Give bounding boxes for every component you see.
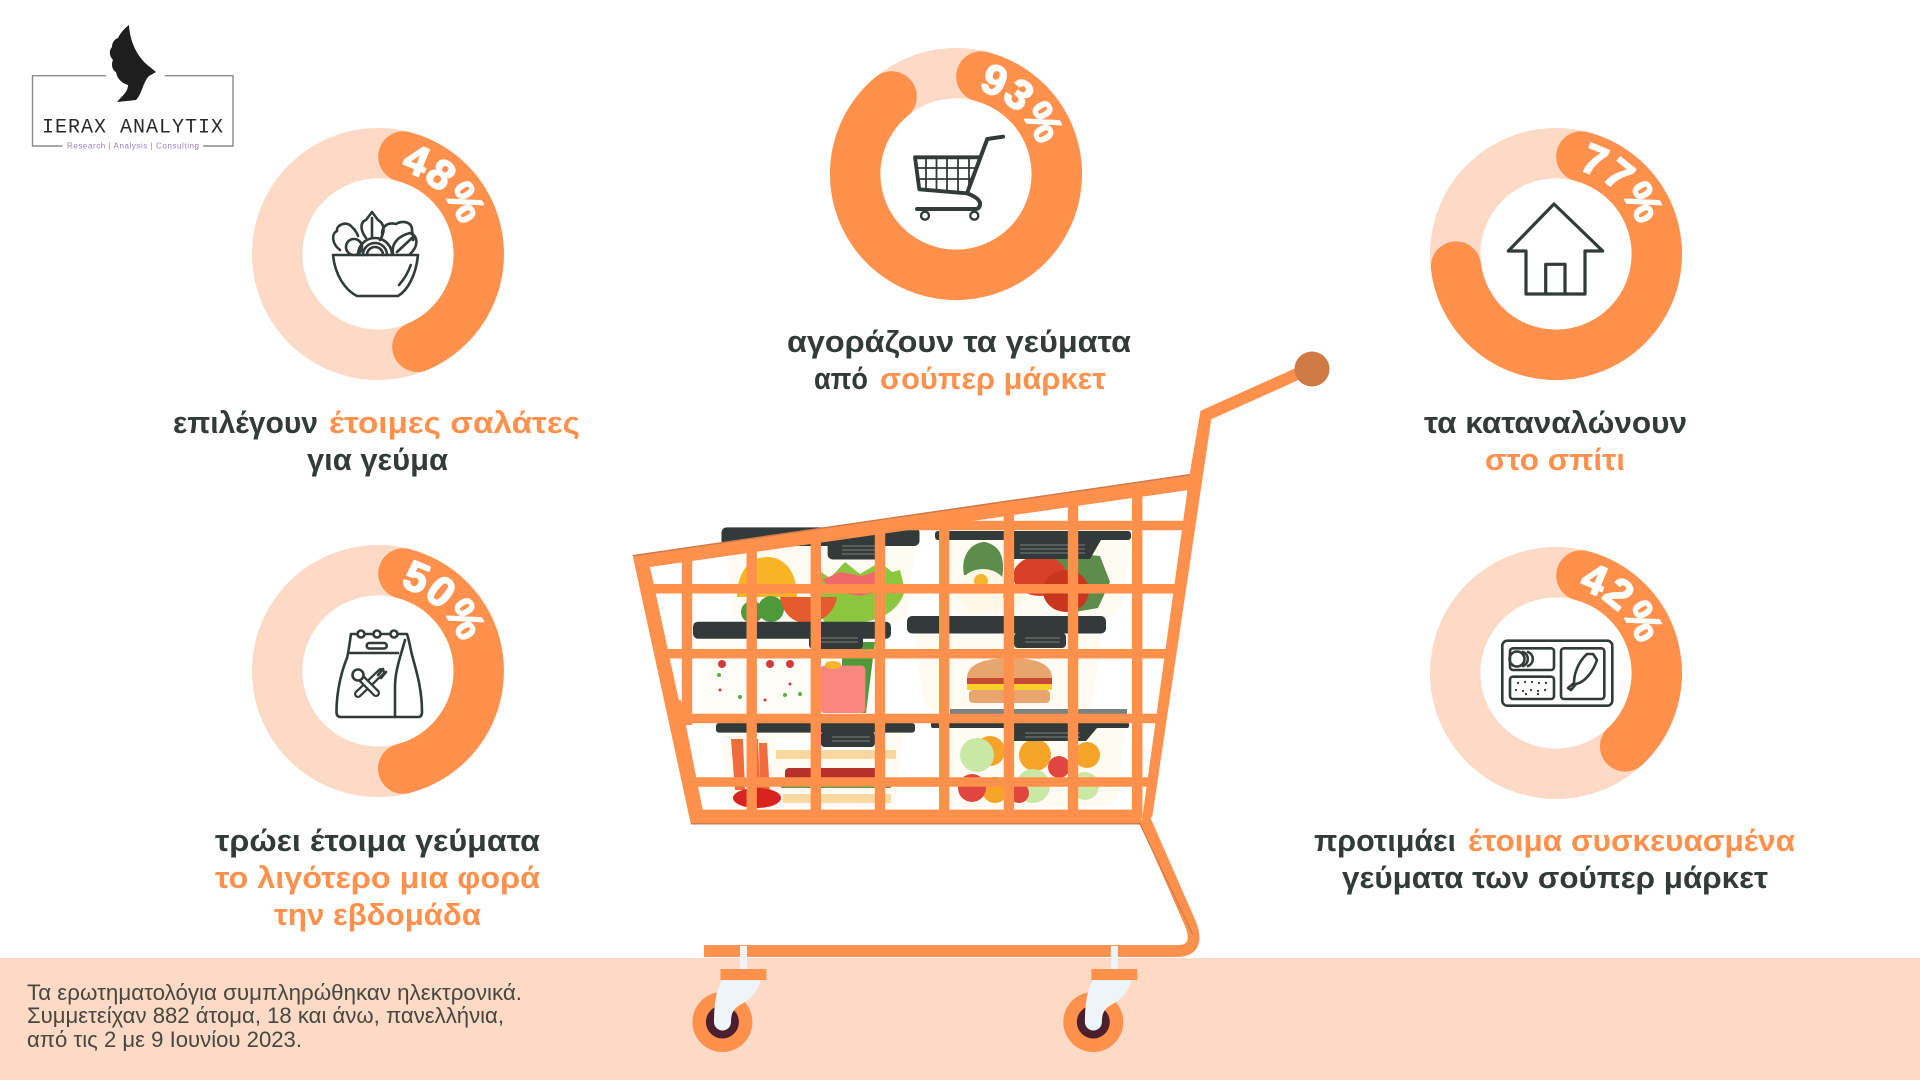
caption: supermarket: από [814, 361, 868, 396]
icon: salad bowl [333, 212, 418, 296]
footer band [0, 958, 1920, 1080]
caption: salads: επιλέγουν [173, 405, 318, 440]
donut: 93% supermarket [830, 48, 1082, 300]
footer note [27, 980, 522, 1052]
container: top right [935, 531, 1131, 616]
caption: packaged meals: γεύματα των σούπερ μάρκετ [1342, 860, 1768, 895]
donut: 77% at home [1430, 128, 1682, 380]
icon: house [1508, 204, 1603, 294]
caption: weekly [215, 823, 540, 932]
donut: 77% at home: 77% [1583, 142, 1662, 223]
donut: 42% packaged meals [1430, 547, 1682, 799]
footer note: Συμμετείχαν 882 άτομα, 18 και άνω, πανελλήνια, [27, 1003, 504, 1028]
cart rim [633, 474, 1191, 567]
left wheel [692, 946, 766, 1052]
cart handle ball [1294, 352, 1330, 386]
caption: weekly: την εβδομάδα [274, 897, 481, 932]
caption: supermarket [787, 324, 1131, 396]
caption: salads [173, 405, 580, 477]
container: top left [722, 527, 920, 624]
cart floor rail [691, 810, 1142, 824]
caption: packaged meals: προτιμάει [1314, 823, 1456, 858]
logo: Ierax Analytix [32, 25, 233, 150]
shopping cart with meals [633, 352, 1330, 1052]
icon: meal tray [1502, 641, 1612, 706]
footer note: Τα ερωτηματολόγια συμπληρώθηκαν ηλεκτρονικά. [27, 980, 522, 1005]
donut: 50% weekly: 50% [403, 560, 484, 640]
icon: shopping cart [915, 137, 1003, 220]
donut: 48% salads: 48% [402, 146, 484, 223]
caption: at home: τα καταναλώνουν [1424, 405, 1687, 440]
right wheel [1063, 946, 1137, 1052]
caption: supermarket: σούπερ μάρκετ [880, 361, 1106, 396]
cart basket grid [633, 474, 1191, 824]
caption: weekly: τρώει έτοιμα γεύματα [215, 823, 540, 858]
cart lower frame [704, 820, 1194, 951]
container: bottom left [716, 723, 915, 808]
container: bottom right [931, 722, 1129, 807]
container: middle right [907, 616, 1127, 714]
caption: salads: έτοιμες σαλάτες [329, 405, 580, 440]
caption: packaged meals: έτοιμα συσκευασμένα [1468, 823, 1795, 858]
icon: food bag [336, 630, 422, 717]
caption: weekly: το λιγότερο μια φορά [215, 860, 540, 895]
donut: 93% supermarket: 93% [982, 64, 1062, 143]
donut: 42% packaged meals: 42% [1580, 566, 1662, 642]
donut: 48% salads [252, 128, 504, 380]
cart right post and handle [1142, 367, 1303, 824]
caption: supermarket: αγοράζουν τα γεύματα [787, 324, 1131, 359]
container: middle left [693, 622, 891, 718]
meal containers [693, 527, 1131, 808]
caption: salads: για γεύμα [307, 442, 448, 477]
logo name: IERAX ANALYTIX [42, 116, 223, 140]
cart left side [633, 556, 703, 824]
footer note: από τις 2 με 9 Ιουνίου 2023. [27, 1027, 302, 1052]
caption: at home [1424, 405, 1687, 477]
donut: 50% weekly [252, 545, 504, 797]
icon: wing [110, 25, 156, 102]
caption: at home: στο σπίτι [1485, 442, 1625, 477]
logo tagline: Research | Analysis | Consulting [67, 142, 199, 150]
caption: packaged meals [1314, 823, 1795, 895]
